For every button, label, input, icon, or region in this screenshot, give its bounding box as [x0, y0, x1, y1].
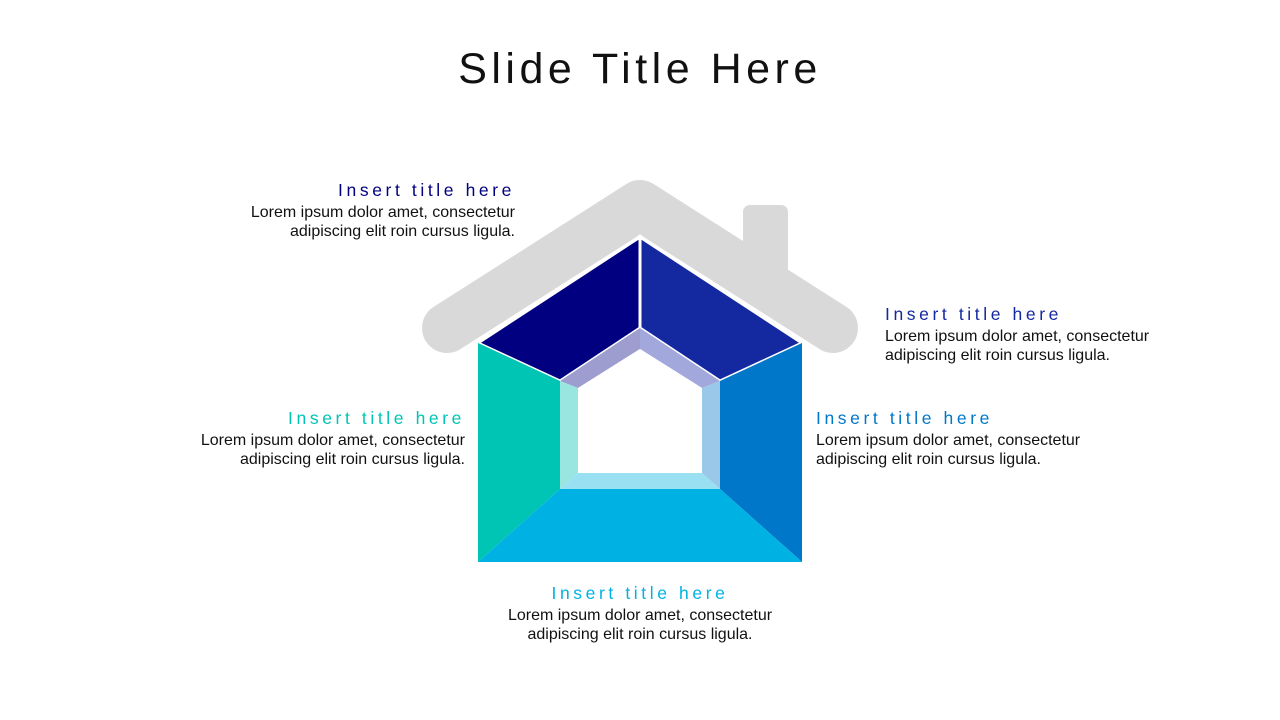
text: adipiscing elit roin cursus ligula.	[885, 347, 1110, 364]
text: Insert title here	[552, 583, 728, 603]
text: Insert title here	[885, 304, 1062, 324]
title: Slide Title Here	[458, 45, 822, 93]
text: adipiscing elit roin cursus ligula.	[240, 451, 465, 468]
roof	[447, 205, 833, 328]
text: Insert title here	[288, 408, 465, 428]
text: adipiscing elit roin cursus ligula.	[290, 223, 515, 240]
text: adipiscing elit roin cursus ligula.	[816, 451, 1041, 468]
text block: top left	[251, 180, 515, 240]
text: Insert title here	[816, 408, 993, 428]
text: adipiscing elit roin cursus ligula.	[528, 626, 752, 643]
text block: mid left	[201, 408, 465, 468]
text block: mid right	[816, 408, 1080, 468]
text: Lorem ipsum dolor amet, consectetur	[251, 204, 515, 221]
text: Insert title here	[338, 180, 515, 200]
text: Lorem ipsum dolor amet, consectetur	[885, 328, 1149, 345]
text: Lorem ipsum dolor amet, consectetur	[816, 432, 1080, 449]
text: Lorem ipsum dolor amet, consectetur	[508, 607, 772, 624]
text block: bottom	[508, 583, 772, 643]
house panels	[478, 237, 802, 562]
text: Lorem ipsum dolor amet, consectetur	[201, 432, 465, 449]
text block: top right	[885, 304, 1149, 364]
